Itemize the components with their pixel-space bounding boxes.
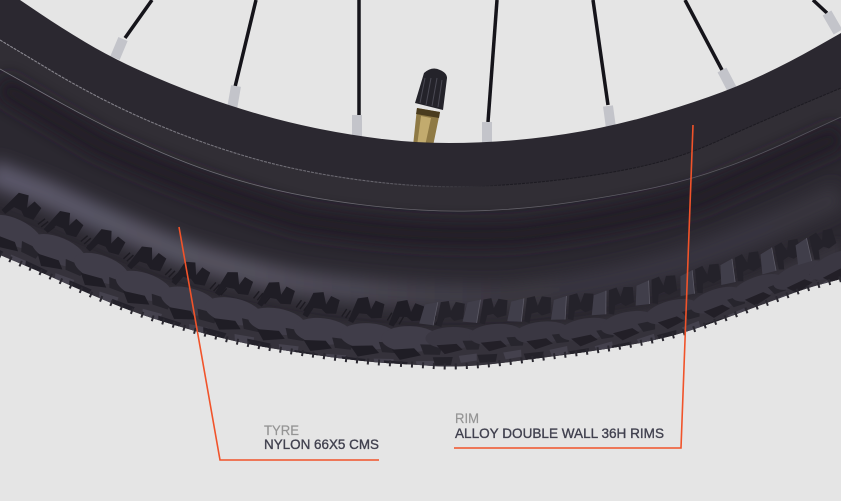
tread lugs: [0, 184, 841, 370]
callout: tyre: NYLON 66X5 CMS: [264, 436, 379, 452]
tread base: [0, 245, 839, 366]
light band above tread: [0, 172, 841, 297]
spokes and nipples: [115, 0, 838, 144]
tread knobs along outer edge: [0, 255, 841, 366]
rim sidewall strip: [0, 40, 841, 211]
tyre and rim body: [0, 0, 841, 400]
icon: inflation valve: [413, 69, 447, 146]
callout: rim: ALLOY DOUBLE WALL 36H RIMS: [455, 425, 664, 441]
callout: tyre: TYRE: [264, 422, 299, 438]
callout: rim: [455, 410, 664, 441]
rim lower wire: [0, 69, 841, 211]
callout: rim: RIM: [455, 410, 479, 426]
rim upper wire: [0, 40, 841, 187]
rim leader line: [454, 125, 693, 448]
dark shadow on sidewall: [0, 85, 841, 235]
callout: tyre: [264, 422, 379, 452]
tyre leader line: [179, 227, 379, 460]
